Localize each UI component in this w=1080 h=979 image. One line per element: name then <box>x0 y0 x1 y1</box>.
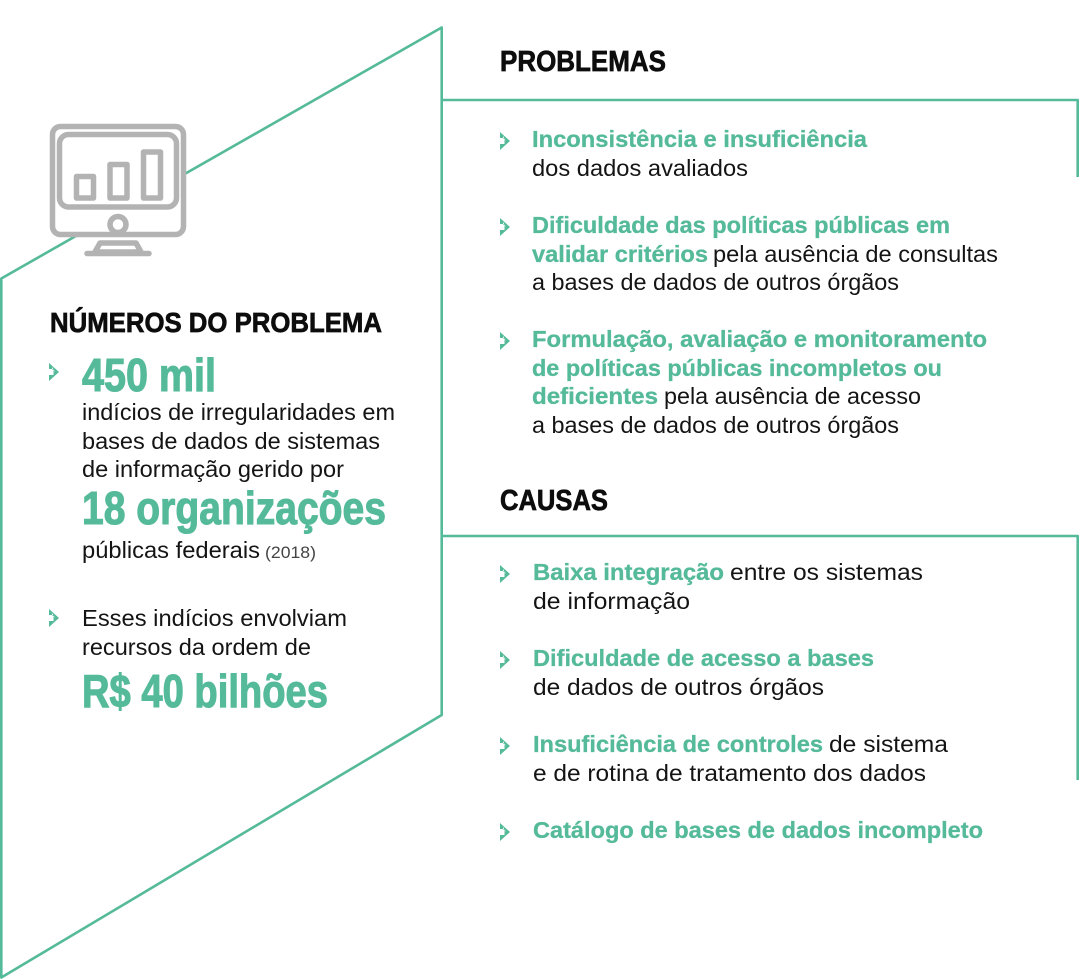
heading: problemas: PROBLEMAS <box>500 46 666 78</box>
problem 2: a bases de dados de outros órgãos <box>532 269 899 295</box>
problem 3: de políticas públicas incompletos ou <box>532 355 942 381</box>
problem 1: Inconsistência e insuficiência <box>532 126 867 152</box>
problem 2: pela ausência de consultas <box>713 241 998 267</box>
heading: causas: CAUSAS <box>500 485 608 517</box>
text block: indícios de irregularidades: indícios de irregularidades em <box>82 399 395 425</box>
panel: números do problema <box>1 28 442 978</box>
cause 3: de sistema <box>829 731 948 757</box>
problem 3: deficientes <box>532 383 658 409</box>
text block: recursos <box>82 605 347 660</box>
text block: públicas federais: (2018) <box>265 543 316 562</box>
problem 2: Dificuldade das políticas públicas em <box>532 212 950 238</box>
cause 3: e de rotina de tratamento dos dados <box>533 760 926 786</box>
cause 3 <box>500 731 948 786</box>
stat: R$ 40 bilhões: R$ 40 bilhões <box>82 665 328 717</box>
cause 1: de informação <box>533 588 690 614</box>
bullet: 450 mil <box>49 363 59 381</box>
problem 3: Formulação, avaliação e monitoramento <box>532 326 987 352</box>
text block: indícios de irregularidades <box>82 399 395 482</box>
panel border: problemas <box>442 100 1078 177</box>
icon: computer monitor with bar chart <box>52 126 184 254</box>
problem 1: dos dados avaliados <box>532 155 748 181</box>
text block: públicas federais: públicas federais <box>82 537 260 563</box>
cause 4: Catálogo de bases de dados incompleto <box>533 817 983 843</box>
text block: indícios de irregularidades: bases de dados de sistemas <box>82 428 380 454</box>
cause 3: Insuficiência de controles <box>533 731 823 757</box>
problem 2: validar critérios <box>532 241 708 267</box>
cause 2: de dados de outros órgãos <box>533 674 824 700</box>
cause 2: Dificuldade de acesso a bases <box>533 645 874 671</box>
problem 1 <box>500 126 867 181</box>
cause 1 <box>500 559 923 614</box>
heading: números do problema: NÚMEROS DO PROBLEMA <box>50 307 382 338</box>
cause 1: Baixa integração <box>533 559 724 585</box>
problem 3: pela ausência de acesso <box>664 383 921 409</box>
text block: recursos: recursos da ordem de <box>82 634 311 660</box>
text block: indícios de irregularidades: de informação gerido por <box>82 456 344 482</box>
cause 1: entre os sistemas <box>730 559 923 585</box>
problem 3 <box>500 326 987 438</box>
panel border: causas <box>442 536 1078 780</box>
text block: recursos: Esses indícios envolviam <box>82 605 347 631</box>
problem 2 <box>500 212 998 295</box>
bullet: recursos <box>49 609 59 627</box>
stat: 18 organizações: 18 organizações <box>82 482 386 534</box>
cause 2 <box>500 645 874 700</box>
stat: 450 mil: 450 mil <box>82 349 216 401</box>
problem 3: a bases de dados de outros órgãos <box>532 412 899 438</box>
